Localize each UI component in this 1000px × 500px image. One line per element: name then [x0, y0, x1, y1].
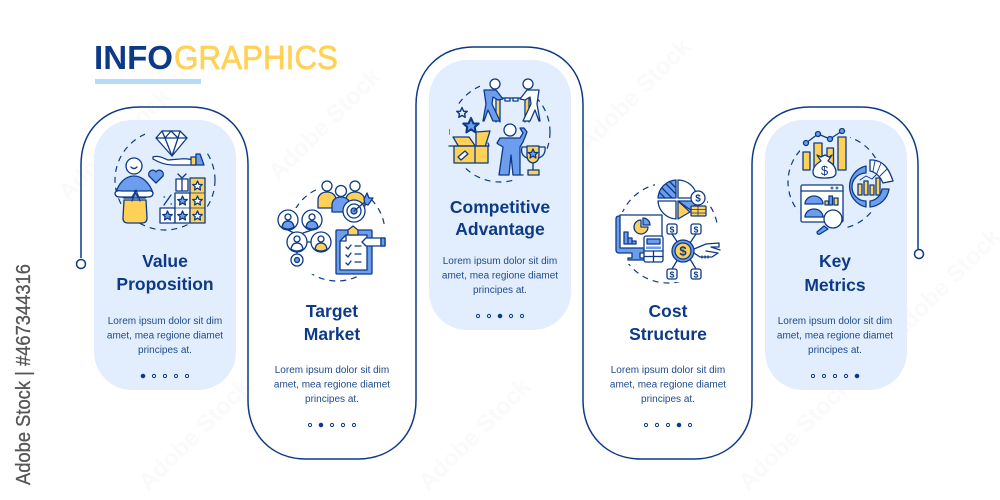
icon: pie chart, calculator and money: $: [670, 270, 675, 280]
body text: Lorem ipsum dolor sit dim: [778, 316, 892, 327]
icon: competition, box and trophy: [449, 78, 550, 182]
heading: Metrics: [804, 275, 866, 295]
body text: principes at.: [808, 345, 862, 356]
panel: target market: [274, 181, 390, 427]
body text: amet, mea regione diamet: [777, 330, 893, 342]
stock credit: Adobe Stock | #467344316: [12, 264, 35, 485]
body text: Lorem ipsum dolor sit dim: [108, 316, 222, 327]
pagination dots: [141, 374, 189, 378]
body text: amet, mea regione diamet: [442, 270, 558, 282]
icon: pie chart, calculator and money: $: [670, 224, 675, 234]
icon: audience, network and checklist: [278, 181, 388, 281]
connecting outline: [76, 47, 924, 459]
pagination dots: [644, 423, 692, 427]
body text: amet, mea regione diamet: [610, 380, 726, 390]
title: GRAPHICS: [174, 39, 338, 76]
icon: pie chart, calculator and money: $: [694, 224, 699, 234]
body text: principes at.: [305, 394, 359, 405]
pagination dots: [476, 314, 524, 318]
body text: Lorem ipsum dolor sit dim: [275, 365, 389, 376]
icon: pie chart, calculator and money: $: [679, 244, 687, 258]
body text: Lorem ipsum dolor sit dim: [443, 256, 557, 267]
text: Adobe Stock: [733, 373, 857, 496]
heading: Advantage: [455, 219, 545, 239]
heading: Cost: [649, 301, 688, 321]
icon: pie chart, calculator and money: $: [695, 194, 701, 204]
heading: Structure: [629, 324, 707, 344]
title: INFO: [94, 39, 173, 76]
heading: Market: [304, 324, 360, 344]
body text: amet, mea regione diamet: [107, 330, 223, 342]
panel: value proposition: [94, 120, 236, 390]
heading: Proposition: [116, 274, 214, 294]
heading: Value: [142, 251, 188, 271]
heading: Target: [306, 301, 358, 321]
pagination dots: [308, 423, 356, 427]
body text: Lorem ipsum dolor sit dim: [611, 365, 725, 376]
body text: amet, mea regione diamet: [274, 380, 390, 390]
icon: charts, money bag and magnifier: [788, 127, 894, 235]
icon: diamond, shopper and ratings: [115, 128, 215, 230]
icon: pie chart, calculator and money: $: [694, 270, 699, 280]
text: Adobe Stock: [133, 373, 257, 496]
heading: Key: [819, 251, 851, 271]
heading: Competitive: [450, 197, 550, 217]
body text: principes at.: [641, 394, 695, 405]
body text: principes at.: [473, 285, 527, 296]
body text: principes at.: [138, 345, 192, 356]
text: Adobe Stock: [413, 373, 537, 496]
text: Adobe Stock: [53, 83, 177, 206]
icon: charts, money bag and magnifier: $: [821, 163, 829, 178]
panel: cost structure: [610, 178, 726, 427]
title: [94, 39, 338, 84]
panel: competitive advantage: [429, 60, 571, 330]
icon: pie chart, calculator and money: [612, 178, 721, 283]
text: Adobe Stock: [573, 33, 697, 156]
pagination dots: [811, 374, 859, 378]
panel: key metrics: [765, 120, 907, 390]
text: Adobe Stock: [263, 63, 387, 186]
